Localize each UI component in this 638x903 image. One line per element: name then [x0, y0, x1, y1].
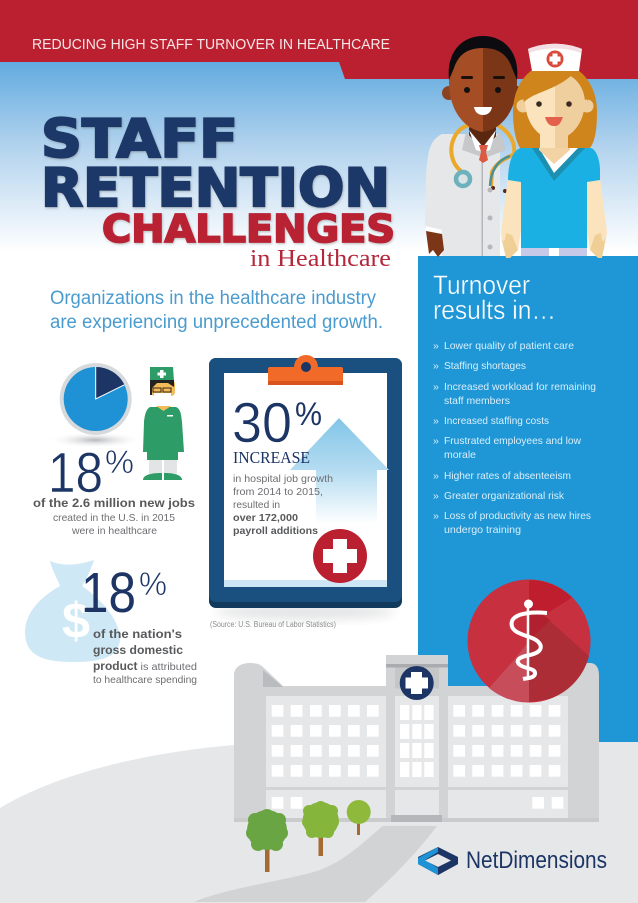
icon: up arrow — [290, 418, 389, 524]
hospital growth text: over 172,000 — [233, 512, 298, 524]
logo wordmark: NetDimensions — [466, 847, 607, 874]
jobs caption: were in healthcare — [71, 525, 157, 537]
turnover list: » — [433, 435, 439, 447]
increase label: INCREASE — [233, 448, 310, 467]
GDP caption: product is attributed — [93, 661, 197, 673]
GDP caption — [93, 629, 197, 686]
icon: money bag: $ — [62, 593, 90, 649]
turnover list: » — [433, 470, 439, 482]
hospital growth text: resulted in — [233, 499, 280, 511]
stethoscope — [451, 125, 514, 186]
jobs caption: created in the U.S. in 2015 — [53, 512, 175, 524]
panel heading: results in… — [433, 295, 556, 325]
jobs caption — [33, 498, 195, 537]
GDP caption: gross domestic — [93, 645, 184, 657]
GDP caption: of the nation's — [93, 629, 182, 641]
clipboard — [209, 355, 402, 620]
stat: 18% GDP: 18 — [81, 561, 136, 625]
windows — [272, 705, 563, 809]
turnover list: undergo training — [444, 524, 521, 536]
icon: caduceus medallion — [468, 580, 591, 702]
stat: 30%: % — [295, 396, 322, 432]
trees — [246, 800, 371, 872]
GDP caption: to healthcare spending — [93, 674, 197, 686]
hospital growth text: payroll additions — [233, 525, 318, 537]
stat: 30%: 30 — [232, 391, 292, 455]
turnover list: Staffing shortages — [444, 360, 526, 372]
logo mark — [418, 847, 458, 875]
turnover list: » — [433, 490, 439, 502]
title: CHALLENGES — [102, 207, 395, 252]
road — [194, 826, 437, 902]
intro text — [50, 288, 383, 333]
title — [41, 109, 395, 252]
turnover list: morale — [444, 449, 476, 461]
turnover list — [433, 340, 596, 536]
turnover list: Higher rates of absenteeism — [444, 470, 571, 482]
source note: (Source: U.S. Bureau of Labor Statistics) — [210, 620, 336, 629]
nurse figure — [501, 44, 607, 258]
header text: REDUCING HIGH STAFF TURNOVER IN HEALTHCARE — [32, 37, 390, 53]
panel heading: Turnover — [433, 270, 530, 300]
turnover list: » — [433, 415, 439, 427]
stat: 18% jobs: 18 — [48, 441, 103, 505]
panel: turnover results — [418, 256, 638, 742]
turnover list: Increased workload for remaining — [444, 381, 596, 393]
turnover list: » — [433, 510, 439, 522]
title: STAFF — [41, 109, 238, 170]
turnover list: » — [433, 381, 439, 393]
logo: NetDimensions — [418, 847, 607, 875]
intro text: Organizations in the healthcare industry — [50, 288, 376, 309]
stat: 18% jobs: % — [105, 444, 134, 480]
background sky — [0, 62, 638, 252]
turnover list: Greater organizational risk — [444, 490, 565, 502]
doctor figure — [425, 36, 523, 257]
ground — [0, 742, 638, 903]
icon: red cross — [313, 529, 367, 583]
turnover list: Lower quality of patient care — [444, 340, 574, 352]
pie chart — [47, 363, 143, 448]
icon: surgeon — [143, 367, 184, 480]
jobs caption: of the 2.6 million new jobs — [33, 498, 195, 510]
subtitle: in Healthcare: in Healthcare — [250, 245, 391, 272]
turnover list: Frustrated employees and low — [444, 435, 581, 447]
clip — [268, 355, 343, 385]
staff and serpent — [512, 600, 547, 679]
turnover list: Loss of productivity as new hires — [444, 510, 591, 522]
turnover list: staff members — [444, 395, 510, 407]
hospital growth text — [233, 473, 333, 537]
hospital growth text: from 2014 to 2015, — [233, 486, 323, 498]
hospital growth text: in hospital job growth — [233, 473, 333, 485]
turnover list: » — [433, 340, 439, 352]
icon: money bag — [25, 560, 120, 662]
panel heading — [433, 270, 556, 325]
title: RETENTION — [41, 158, 390, 219]
header banner — [0, 0, 638, 79]
turnover list: » — [433, 360, 439, 372]
hospital building — [234, 655, 599, 822]
turnover list: Increased staffing costs — [444, 415, 549, 427]
stat: 18% GDP: % — [139, 566, 167, 602]
icon: hospital cross — [400, 666, 434, 700]
stat: 18% jobs — [33, 441, 195, 537]
intro text: are experiencing unprecedented growth. — [50, 312, 383, 333]
stat: 18% GDP — [81, 561, 197, 686]
